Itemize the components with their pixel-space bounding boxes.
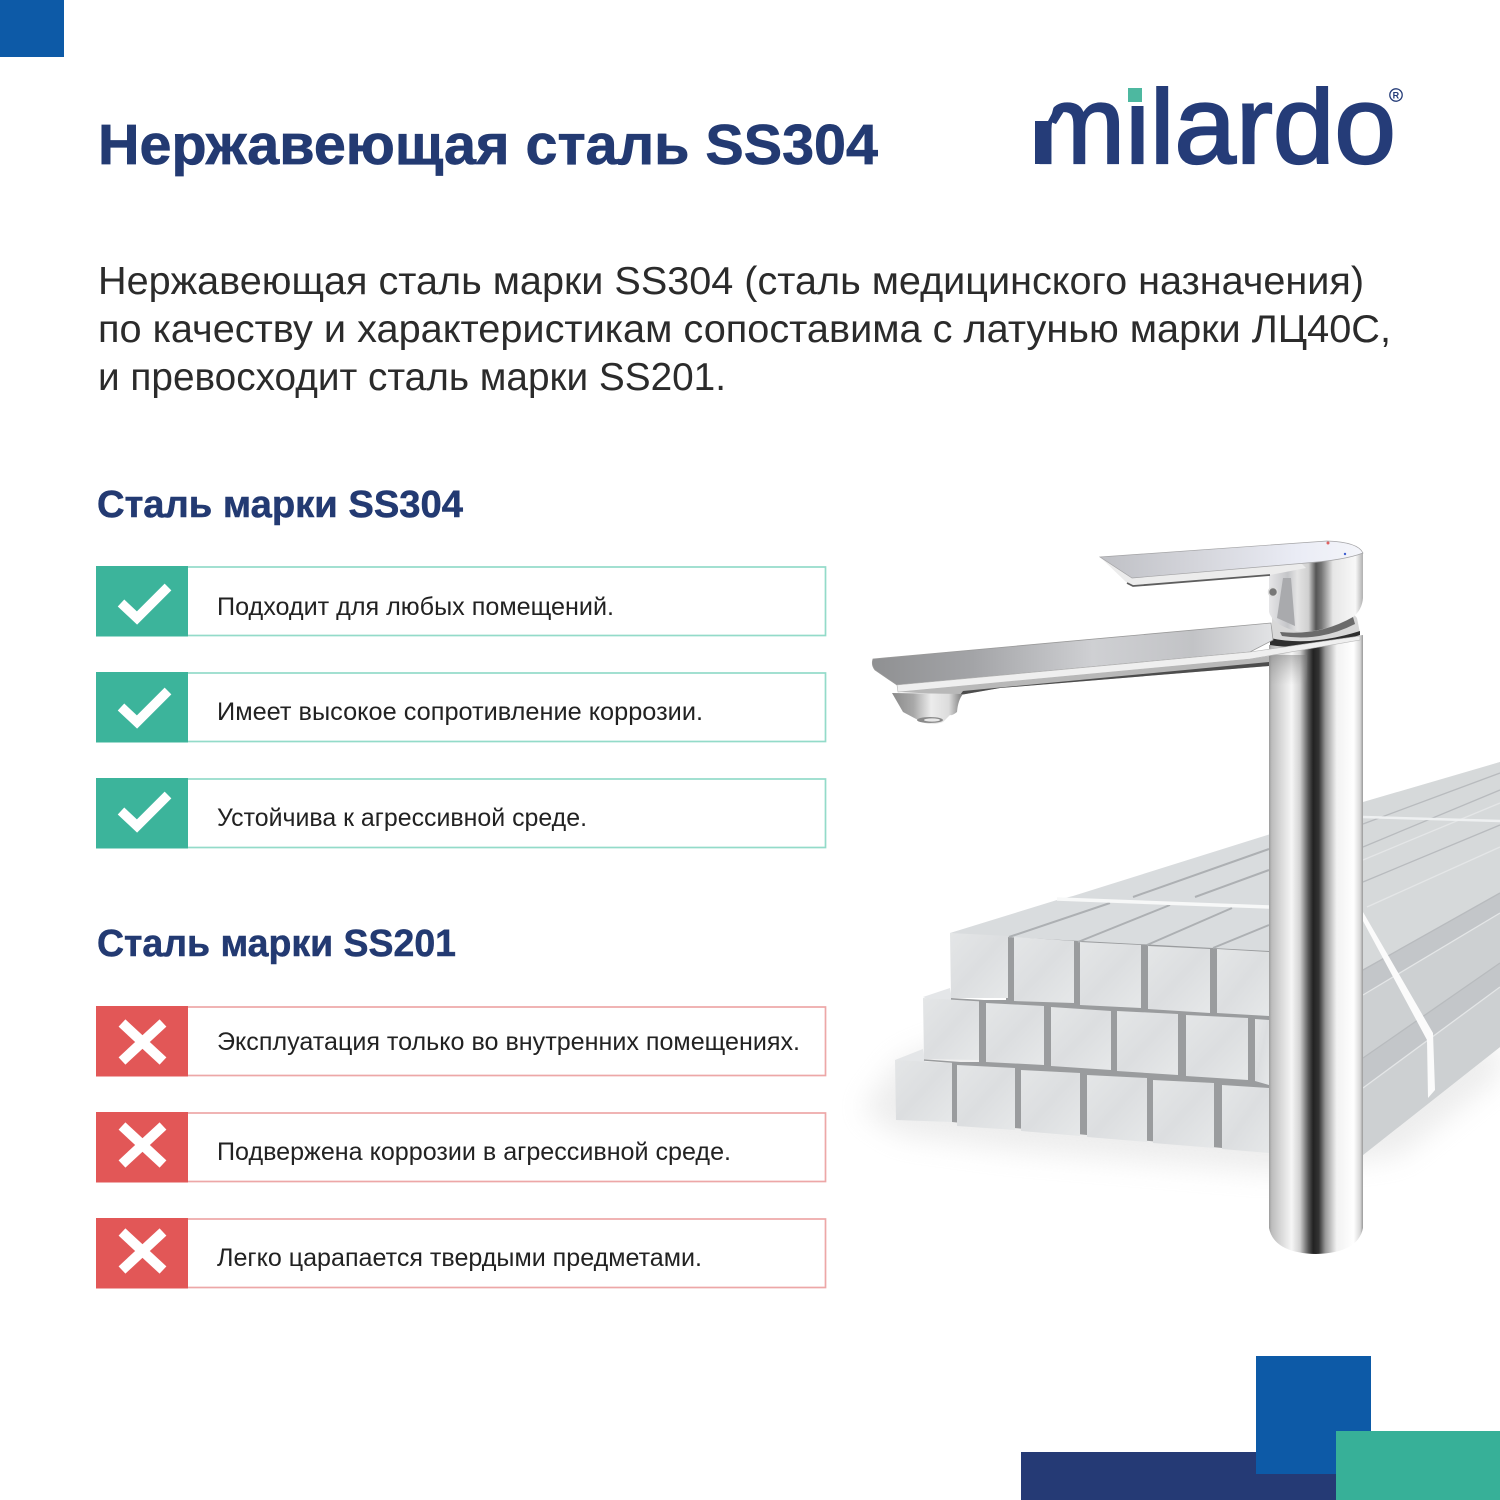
panel: SS201 row 2 [96,1112,826,1182]
top strap [1057,899,1269,907]
faucet lever lip [1100,557,1306,586]
intro paragraph: и превосходит сталь марки SS201. [98,356,726,399]
logo: milardo: milardo [1033,64,1396,187]
panel: SS304 row 2: Имеет высокое сопротивление коррозии. [217,698,703,726]
faucet handle body [1269,552,1363,632]
logo: milardo: R [1393,90,1400,100]
panel: SS201 row 1 [96,1006,826,1076]
title: Нержавеющая сталь SS304 [98,113,878,177]
illustration: faucet [872,541,1363,1254]
front faces row 2 [923,998,1269,1085]
front faces row 1 [950,933,1269,1016]
panel: SS201 row 2: Подвержена коррозии в агрессивной среде. [217,1138,731,1166]
top surface gap lines [1009,849,1269,948]
panel: SS304 row 3: Устойчива к агрессивной среде. [217,804,587,832]
panel: SS201 row 3 [96,1218,826,1288]
panel: SS304 row 1: Подходит для любых помещений. [217,593,614,621]
faucet column [1269,635,1363,1254]
panel: SS201 row 3: Легко царапается твердыми предметами. [217,1244,702,1272]
lines between rows [924,999,1269,1086]
panel: SS304 row 2 [96,672,826,742]
intro paragraph: по качеству и характеристикам сопоставима с латунью марки ЛЦ40С, [98,308,1391,351]
left stepped sides [923,988,952,1000]
dark gap backing [952,937,1269,1152]
straps [1363,817,1500,821]
faucet spout top [872,623,1273,685]
heading: SS201: Сталь марки SS201 [97,923,456,965]
front faces row 3 [895,1060,1269,1153]
faucet collar [1272,610,1360,644]
top surface of bundle [950,762,1500,960]
intro paragraph: Нержавеющая сталь марки SS304 (сталь медицинского назначения) [98,260,1364,303]
panel: SS304 row 3 [96,778,826,848]
faucet spout lip [897,636,1360,692]
intro paragraph [98,260,1391,399]
faucet lever top [1100,541,1363,578]
illustration: bundle of steel bars [862,762,1500,1172]
faucet aerator [892,693,963,724]
right side of bundle [1363,762,1500,1155]
decor: top-left blue square [0,0,64,57]
panel: SS304 row 1 [96,566,826,636]
faucet spout underside [898,656,1269,695]
decor: bottom-right blocks [1021,1356,1500,1500]
panel: SS201 row 1: Эксплуатация только во внутренних помещениях. [217,1028,800,1056]
heading: SS304: Сталь марки SS304 [97,484,463,526]
